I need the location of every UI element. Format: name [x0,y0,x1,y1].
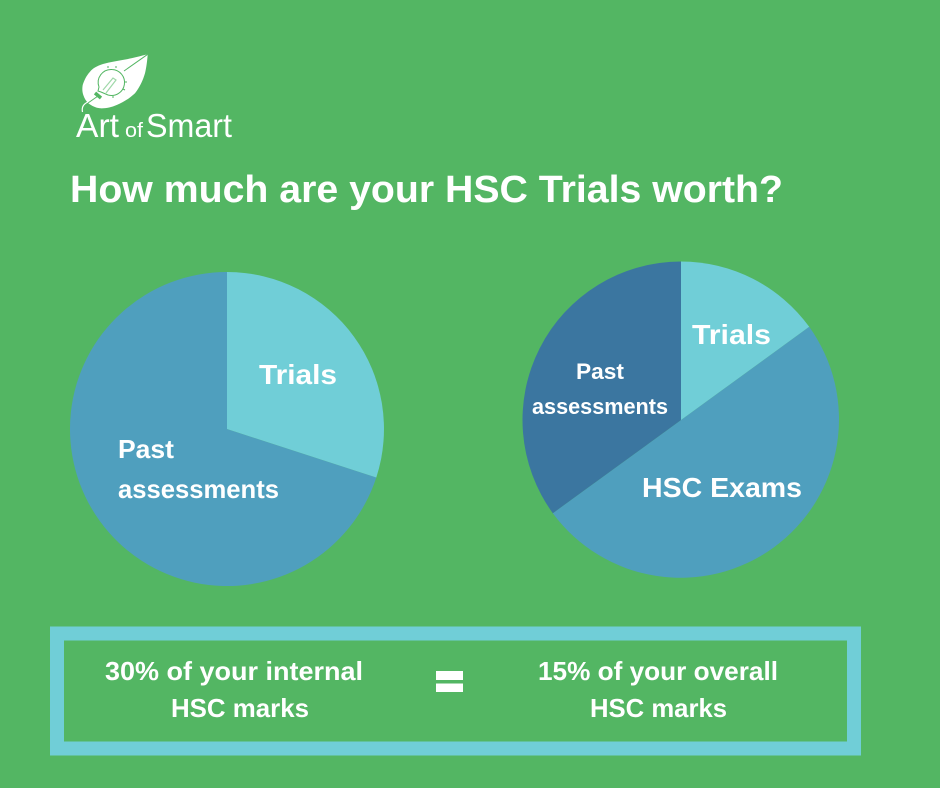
logo wordmark: Art: Art [76,107,119,144]
pie chart: overall marks [523,262,839,578]
label: trials: Trials [692,319,771,350]
label: past assessments: assessments [118,474,279,504]
label: HSC exams: HSC Exams [642,472,802,503]
slice: HSC exams [553,327,839,578]
label: past assessments: Past [576,359,625,384]
slice: past assessments [523,262,681,513]
slice: trials [681,262,809,420]
icon: leaf with light bulb [82,54,148,112]
left text: 30% of your internal [105,656,363,686]
label: past assessments: assessments [532,394,668,419]
callout box [57,634,854,748]
right text: HSC marks [590,693,727,723]
pie chart: internal marks [70,272,384,586]
box frame [57,634,854,748]
right text: 15% of your overall [538,656,778,686]
slice: past assessments [70,272,376,586]
equals sign [436,671,463,692]
label: past assessments: Past [118,434,174,464]
title: How much are your HSC Trials worth? [70,169,783,211]
left text: HSC marks [171,693,309,723]
logo wordmark: of: of [125,120,143,142]
slice: trials [227,272,384,478]
logo wordmark: Smart: Smart [146,107,232,144]
label: trials: Trials [259,359,337,390]
logo: Art of Smart [76,54,232,144]
